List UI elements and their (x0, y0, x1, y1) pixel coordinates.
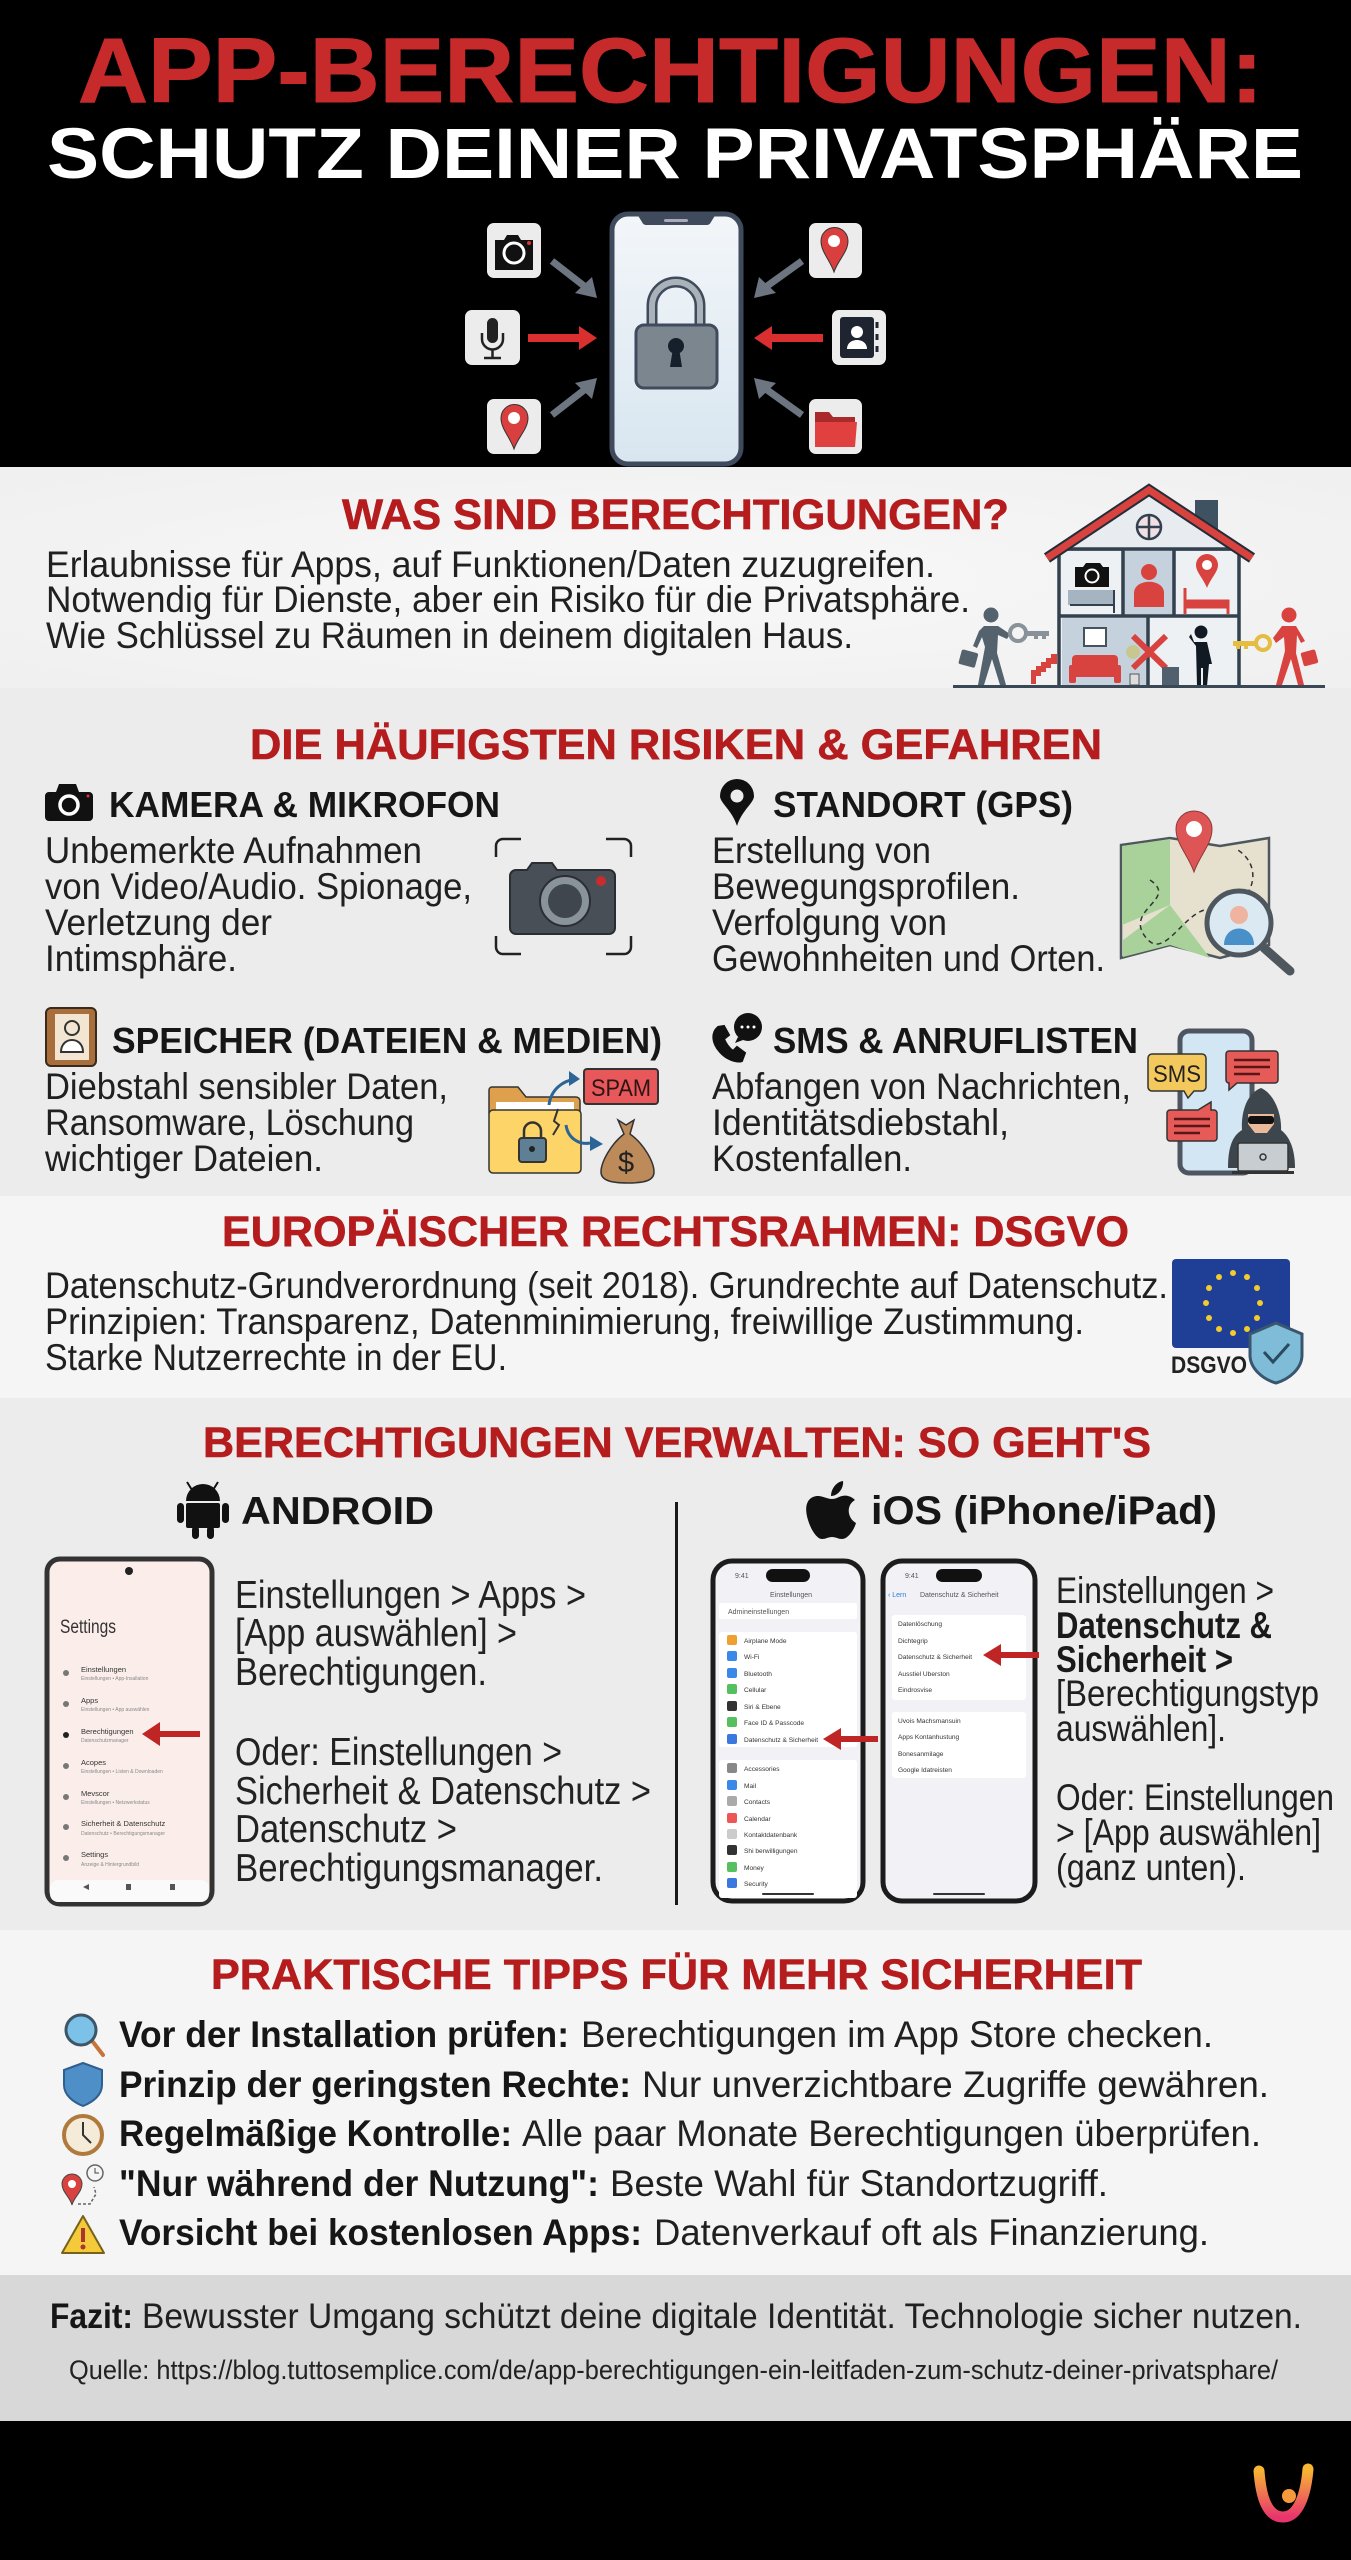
spam box (584, 1069, 658, 1104)
ios text: auswählen]. (1056, 1708, 1226, 1749)
android text: Datenschutz > (235, 1808, 457, 1851)
heading: EUROPÄISCHER RECHTSRAHMEN: DSGVO (222, 1208, 1129, 1256)
illustration: map with magnifier (1121, 811, 1290, 971)
icon: magnifier (66, 2015, 103, 2055)
illustration: folder, spam, money bag (489, 1069, 658, 1183)
settings rows: Calendar (744, 1816, 772, 1823)
icon: phone with speech bubble (713, 1013, 762, 1062)
settings rows: Airplane Mode (744, 1638, 787, 1645)
settings rows: Einstellungen • Netzwerkstatus (81, 1800, 150, 1806)
iphone mockup 1 (713, 1561, 863, 1901)
arrow grey bottom left (552, 378, 597, 415)
settings rows: Contacts (744, 1799, 771, 1806)
icon tile: folder (809, 399, 862, 454)
panel: dsgvo (0, 1196, 1351, 1398)
text: Bewegungsprofilen. (712, 866, 1020, 907)
text: Erstellung von (712, 830, 931, 871)
laptop (1232, 1143, 1294, 1174)
icon: apple (806, 1481, 856, 1539)
red arrow (142, 1722, 200, 1746)
person with key left (973, 608, 1010, 685)
tip 5 (62, 2212, 1209, 2253)
person with key right (1273, 608, 1305, 685)
room icon: pin (1196, 554, 1218, 588)
tip 3: Regelmäßige Kontrolle: (119, 2113, 512, 2154)
divider (675, 1502, 678, 1905)
settings rows: Mail (744, 1783, 757, 1790)
red stairs (1031, 654, 1057, 684)
red bubble bottom (1167, 1102, 1217, 1141)
grey bed (1068, 590, 1114, 613)
tip 4: "Nur während der Nutzung": (119, 2163, 599, 2204)
settings rows: Dichtegrip (898, 1638, 928, 1645)
tip 3 (64, 2113, 1261, 2154)
body text: Datenschutz-Grundverordnung (seit 2018). Grundrechte auf Datenschutz. (45, 1265, 1168, 1306)
android phone mockup: Settings (60, 1617, 116, 1638)
heading: PRAKTISCHE TIPPS FÜR MEHR SICHERHEIT (211, 1951, 1142, 1999)
map pin (1176, 811, 1212, 872)
sms bubble: SMS (1153, 1061, 1201, 1088)
arrow grey top left (552, 261, 597, 298)
briefcase right (1300, 649, 1319, 667)
iphone mockup 1: Einstellungen (770, 1592, 812, 1599)
text: Gewohnheiten und Orten. (712, 938, 1105, 979)
settings rows: Ausstiel Uberston (898, 1671, 950, 1678)
illustration: house with keys (953, 490, 1325, 688)
illustration: eu flag with shield (1171, 1259, 1302, 1383)
picture (1084, 628, 1106, 646)
android text: Oder: Einstellungen > (235, 1731, 562, 1774)
heading: WAS SIND BERECHTIGUNGEN? (342, 491, 1009, 539)
arrow red mid right (754, 326, 823, 350)
android text: Einstellungen > Apps > (235, 1574, 586, 1617)
conclusion: Fazit: (50, 2297, 133, 2336)
icon: shield (64, 2063, 102, 2106)
icon: camera (45, 784, 93, 821)
risk: speicher (44, 1008, 662, 1183)
heading: DIE HÄUFIGSTEN RISIKEN & GEFAHREN (250, 721, 1102, 769)
icon tile: microphone (465, 310, 520, 365)
risk: sms (712, 1013, 1295, 1179)
text (712, 830, 1105, 979)
settings rows: Datenschutz & Sicherheit (898, 1654, 972, 1661)
ios column (713, 1481, 1334, 1901)
settings rows: Shi berwilligungen (744, 1848, 798, 1855)
icon tile: camera (487, 223, 541, 278)
subheading: KAMERA & MIKROFON (109, 784, 500, 825)
panel: was sind berechtigungen (0, 467, 1351, 688)
tip 1: Berechtigungen im App Store checken. (581, 2014, 1213, 2055)
settings rows: Bonesanmilage (898, 1751, 944, 1758)
tip 4: Beste Wahl für Standortzugriff. (610, 2163, 1108, 2204)
body text (46, 544, 970, 656)
settings rows: Kontaktdatenbank (744, 1832, 798, 1839)
settings rows: Sicherheit & Datenschutz (81, 1819, 165, 1828)
phone (612, 214, 741, 464)
text: Verfolgung von (712, 902, 947, 943)
body text: Wie Schlüssel zu Räumen in deinem digitalen Haus. (46, 615, 853, 656)
text: Unbemerkte Aufnahmen (45, 830, 422, 871)
settings rows: Einstellungen • Listen & Downloaden (81, 1769, 163, 1775)
body text (45, 1265, 1168, 1378)
magnifier (1264, 948, 1290, 971)
text: von Video/Audio. Spionage, (45, 866, 472, 907)
settings rows: Mevscor (81, 1789, 110, 1798)
hacker (1228, 1088, 1295, 1168)
panel: tipps (0, 1930, 1351, 2275)
settings rows: Einstellungen • App-Insallation (81, 1676, 149, 1682)
settings rows: Security (744, 1881, 769, 1888)
settings rows: Google Idatreisten (898, 1767, 952, 1774)
android text: [App auswählen] > (235, 1612, 517, 1655)
settings rows: Apps Kontanhustung (898, 1734, 960, 1741)
chimney (1195, 500, 1218, 535)
text: Diebstahl sensibler Daten, (45, 1066, 448, 1107)
panel: verwalten (0, 1398, 1351, 1930)
risk: kamera (45, 784, 631, 979)
dsgvo label: DSGVO (1171, 1352, 1247, 1379)
icon: black pin (720, 779, 754, 826)
title line 2: SCHUTZ DEINER PRIVATSPHÄRE (47, 115, 1303, 194)
android text: Sicherheit & Datenschutz > (235, 1770, 651, 1813)
illustration: phone with padlock and permission icons (465, 214, 886, 464)
ios text: Datenschutz & (1056, 1605, 1272, 1646)
arrow grey bottom right (754, 378, 802, 415)
settings rows (898, 1621, 972, 1774)
heading: BERECHTIGUNGEN VERWALTEN: SO GEHT'S (203, 1419, 1151, 1467)
illustration: camera in frame (496, 839, 631, 954)
body text: Prinzipien: Transparenz, Datenminimierung, freiwillige Zustimmung. (45, 1301, 1084, 1342)
settings rows: Acopes (81, 1758, 106, 1767)
attic window (1137, 515, 1161, 539)
money bag (601, 1120, 654, 1183)
settings rows (63, 1665, 165, 1868)
ios text: (ganz unten). (1056, 1847, 1246, 1888)
shield (1250, 1323, 1302, 1383)
ios label: iOS (iPhone/iPad) (871, 1489, 1217, 1533)
sms bubble (1148, 1054, 1206, 1098)
text (712, 1066, 1131, 1179)
source: Quelle: https://blog.tuttosemplice.com/de/app-berechtigungen-ein-leitfaden-zum-schutz-deiner-privatsphare/ (69, 2355, 1278, 2385)
panel: risiken (0, 688, 1351, 1196)
folder (489, 1087, 580, 1113)
subheading: SPEICHER (DATEIEN & MEDIEN) (112, 1020, 662, 1061)
settings rows: Einstellungen (81, 1665, 126, 1674)
tip 1 (66, 2014, 1213, 2055)
tip 2: Prinzip der geringsten Rechte: (119, 2064, 631, 2105)
red sofa (1069, 655, 1121, 683)
settings rows: Wi-Fi (744, 1654, 760, 1661)
cabinet (1162, 667, 1179, 686)
subheading: SMS & ANRUFLISTEN (773, 1020, 1138, 1061)
settings rows: Apps (81, 1696, 98, 1705)
body text: Erlaubnisse für Apps, auf Funktionen/Daten zuzugreifen. (46, 544, 935, 585)
house walls (1059, 549, 1239, 687)
text: Verletzung der (45, 902, 272, 943)
android label: ANDROID (241, 1490, 434, 1533)
settings rows: Uvois Machsmansuin (898, 1718, 961, 1725)
android column (47, 1482, 651, 1904)
tip 5: Datenverkauf oft als Finanzierung. (654, 2212, 1209, 2253)
text: Intimsphäre. (45, 938, 237, 979)
room icon: person (1134, 564, 1164, 607)
briefcase left (958, 649, 979, 668)
text: Ransomware, Löschung (45, 1102, 414, 1143)
icon: padlock (636, 282, 717, 388)
icon tile: location top (809, 223, 862, 278)
body text: Notwendig für Dienste, aber ein Risiko für die Privatsphäre. (46, 579, 970, 620)
icon: pin with clock (62, 2165, 103, 2205)
text: Kostenfallen. (712, 1138, 912, 1179)
tip 2: Nur unverzichtbare Zugriffe gewähren. (642, 2064, 1269, 2105)
ios text: Einstellungen > (1056, 1570, 1274, 1611)
figure in room (1189, 626, 1212, 686)
settings rows: Datenschutzmanager (81, 1738, 129, 1744)
iphone mockup 1: Admineinstellungen (728, 1609, 789, 1616)
settings rows: Money (744, 1865, 764, 1872)
iphone mockup 2 (883, 1561, 1035, 1901)
settings rows: Settings (81, 1850, 108, 1859)
text: Identitätsdiebstahl, (712, 1102, 1009, 1143)
red cross (1133, 636, 1166, 668)
conclusion: Bewusster Umgang schützt deine digitale Identität. Technologie sicher nutzen. (142, 2297, 1302, 2336)
icon: warning (62, 2216, 104, 2253)
settings rows: Bluetooth (744, 1671, 772, 1678)
ground line (953, 685, 1325, 688)
iphone mockup 1: 9:41 (735, 1573, 749, 1580)
blue arrows (549, 1079, 590, 1143)
android text: Berechtigungsmanager. (235, 1847, 603, 1890)
tip 1: Vor der Installation prüfen: (119, 2014, 569, 2055)
tip 5: Vorsicht bei kostenlosen Apps: (119, 2212, 642, 2253)
subheading: STANDORT (GPS) (773, 784, 1073, 825)
tip 2 (64, 2063, 1269, 2106)
money bag: $ (618, 1147, 634, 1179)
settings rows: Face ID & Passcode (744, 1720, 804, 1727)
text (44, 1066, 448, 1179)
red bed (1185, 588, 1228, 614)
key left (1010, 625, 1049, 641)
key right (1233, 636, 1270, 650)
arrow grey top right (754, 261, 802, 298)
settings rows: Datenschutz • Berechtigungsmanager (81, 1831, 165, 1837)
settings rows: Datenlöschung (898, 1621, 942, 1628)
tip 4 (62, 2163, 1108, 2205)
android text: Berechtigungen. (235, 1651, 487, 1694)
icon tile: contacts (832, 310, 886, 365)
ios text: [Berechtigungstyp (1056, 1673, 1319, 1714)
iphone mockup 2: ‹ Lern (888, 1592, 906, 1599)
roof (1047, 490, 1252, 558)
settings rows: Siri & Ebene (744, 1704, 781, 1711)
settings rows: Einstellungen • App auswählen (81, 1707, 150, 1713)
settings rows: Eindrosvise (898, 1687, 932, 1694)
header panel (47, 20, 1303, 464)
ios text (1056, 1570, 1334, 1888)
title line 1: APP-BERECHTIGUNGEN: (78, 20, 1263, 122)
tip 3: Alle paar Monate Berechtigungen überprüfen. (522, 2113, 1261, 2154)
icon: clock (64, 2116, 102, 2154)
spam box: SPAM (591, 1075, 651, 1102)
text: Abfangen von Nachrichten, (712, 1066, 1131, 1107)
red arrow phone 1 (823, 1728, 878, 1750)
settings rows: Accessories (744, 1766, 780, 1773)
arrow red mid left (528, 326, 597, 350)
folder lock (519, 1122, 546, 1162)
iphone mockup 2: Datenschutz & Sicherheit (920, 1592, 999, 1599)
risk: standort (712, 779, 1290, 979)
settings rows: Anzeige & Hintergrundbild (81, 1862, 139, 1868)
panel: fazit and source (0, 2275, 1351, 2421)
settings rows (727, 1635, 818, 1888)
plant (1126, 645, 1140, 685)
icon tile: location bottom (487, 399, 541, 454)
android text (235, 1574, 651, 1890)
ios text: Sicherheit > (1056, 1639, 1233, 1680)
red bubble top (1226, 1051, 1278, 1090)
rooms (1059, 549, 1239, 687)
icon: android (177, 1482, 229, 1539)
logo (1259, 2469, 1308, 2517)
body text: Starke Nutzerrechte in der EU. (45, 1337, 507, 1378)
iphone mockup 2: 9:41 (905, 1573, 919, 1580)
eu stars (1203, 1270, 1263, 1336)
red arrow phone 2 (983, 1644, 1039, 1666)
android phone mockup (47, 1559, 212, 1904)
text (45, 830, 472, 979)
settings rows: Datenschutz & Sicherheit (744, 1737, 818, 1744)
illustration: phone, bubbles, hacker (1148, 1031, 1295, 1174)
text: wichtiger Dateien. (44, 1138, 323, 1179)
icon: address book (46, 1008, 96, 1066)
settings rows: Berechtigungen (81, 1727, 134, 1736)
room icon: camera (1075, 563, 1109, 587)
settings rows: Cellular (744, 1687, 767, 1694)
